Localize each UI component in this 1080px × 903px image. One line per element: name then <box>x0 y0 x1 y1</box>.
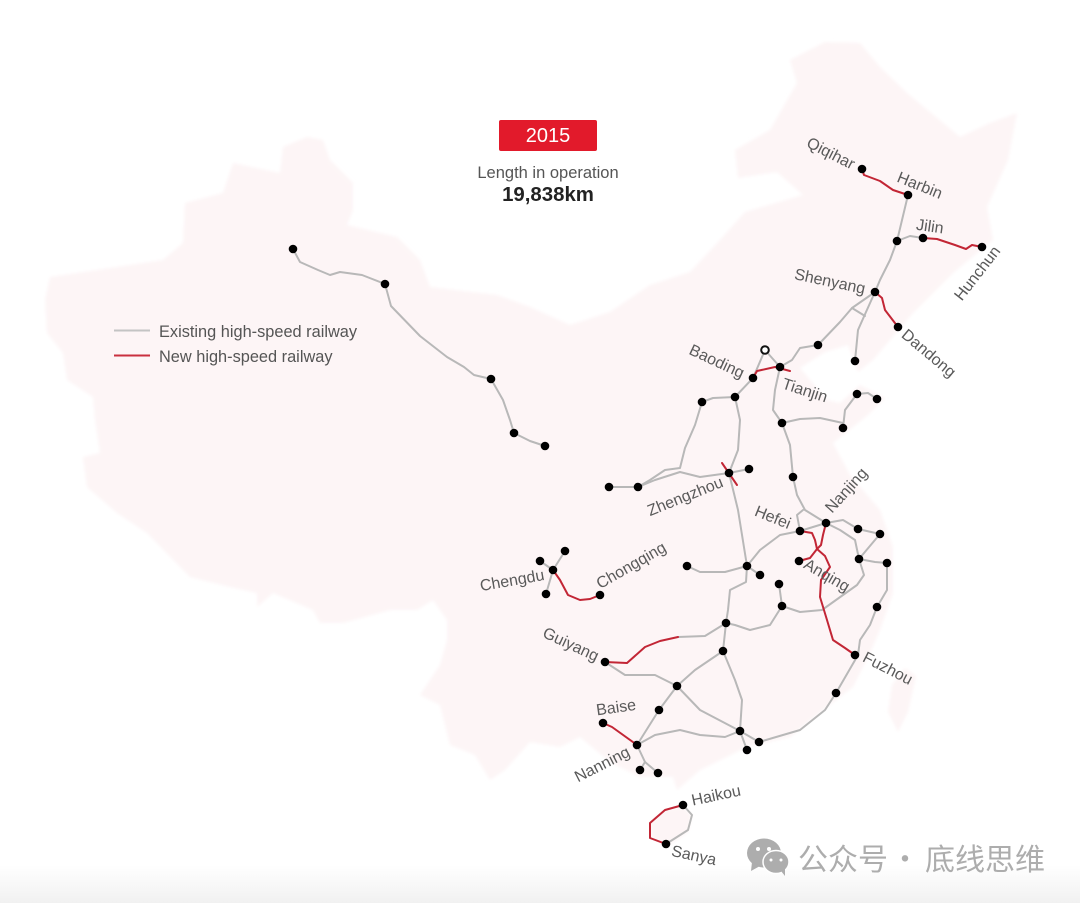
watermark <box>747 835 1045 879</box>
legend: Existing high-speed railway <box>159 323 358 341</box>
existing high-speed railway lines <box>293 195 923 844</box>
city labels: Dandong <box>898 326 959 381</box>
city labels: Chengdu <box>479 567 546 595</box>
city labels: Chongqing <box>594 539 669 593</box>
city labels: Jilin <box>915 217 945 237</box>
city labels: Tianjin <box>780 376 829 406</box>
watermark: 公众号 <box>798 835 888 879</box>
city labels: Harbin <box>895 169 945 203</box>
city labels: Haikou <box>690 783 742 810</box>
city labels: Baise <box>595 697 637 719</box>
city labels: Hefei <box>752 503 793 533</box>
city labels: Qiqihar <box>804 135 858 174</box>
watermark: · <box>890 835 920 879</box>
icon: WeChat <box>747 838 789 876</box>
legend: New high-speed railway <box>159 348 333 366</box>
station dots <box>289 165 986 848</box>
year badge <box>499 120 597 151</box>
bottom shading <box>0 865 1080 903</box>
city labels: Fuzhou <box>860 649 915 689</box>
new high-speed railway lines <box>553 169 982 844</box>
icon: Beijing star marker <box>761 346 769 354</box>
city labels: Anqing <box>801 556 852 596</box>
city labels: Guiyang <box>540 625 601 665</box>
length in operation text <box>477 164 619 206</box>
city labels: Zhengzhou <box>645 474 726 520</box>
city labels: Nanning <box>572 744 633 786</box>
city labels: Baoding <box>686 342 747 382</box>
length in operation text: Length in operation <box>477 164 619 182</box>
city labels: Sanya <box>670 843 718 869</box>
city labels: Hunchun <box>951 243 1004 304</box>
city labels: Nanjing <box>822 465 871 517</box>
city labels: Shenyang <box>793 266 867 298</box>
legend <box>114 323 358 366</box>
watermark: 底线思维 <box>925 835 1045 879</box>
length in operation text: 19,838km <box>502 184 594 206</box>
year badge: 2015 <box>526 125 570 147</box>
city labels <box>479 135 1004 869</box>
